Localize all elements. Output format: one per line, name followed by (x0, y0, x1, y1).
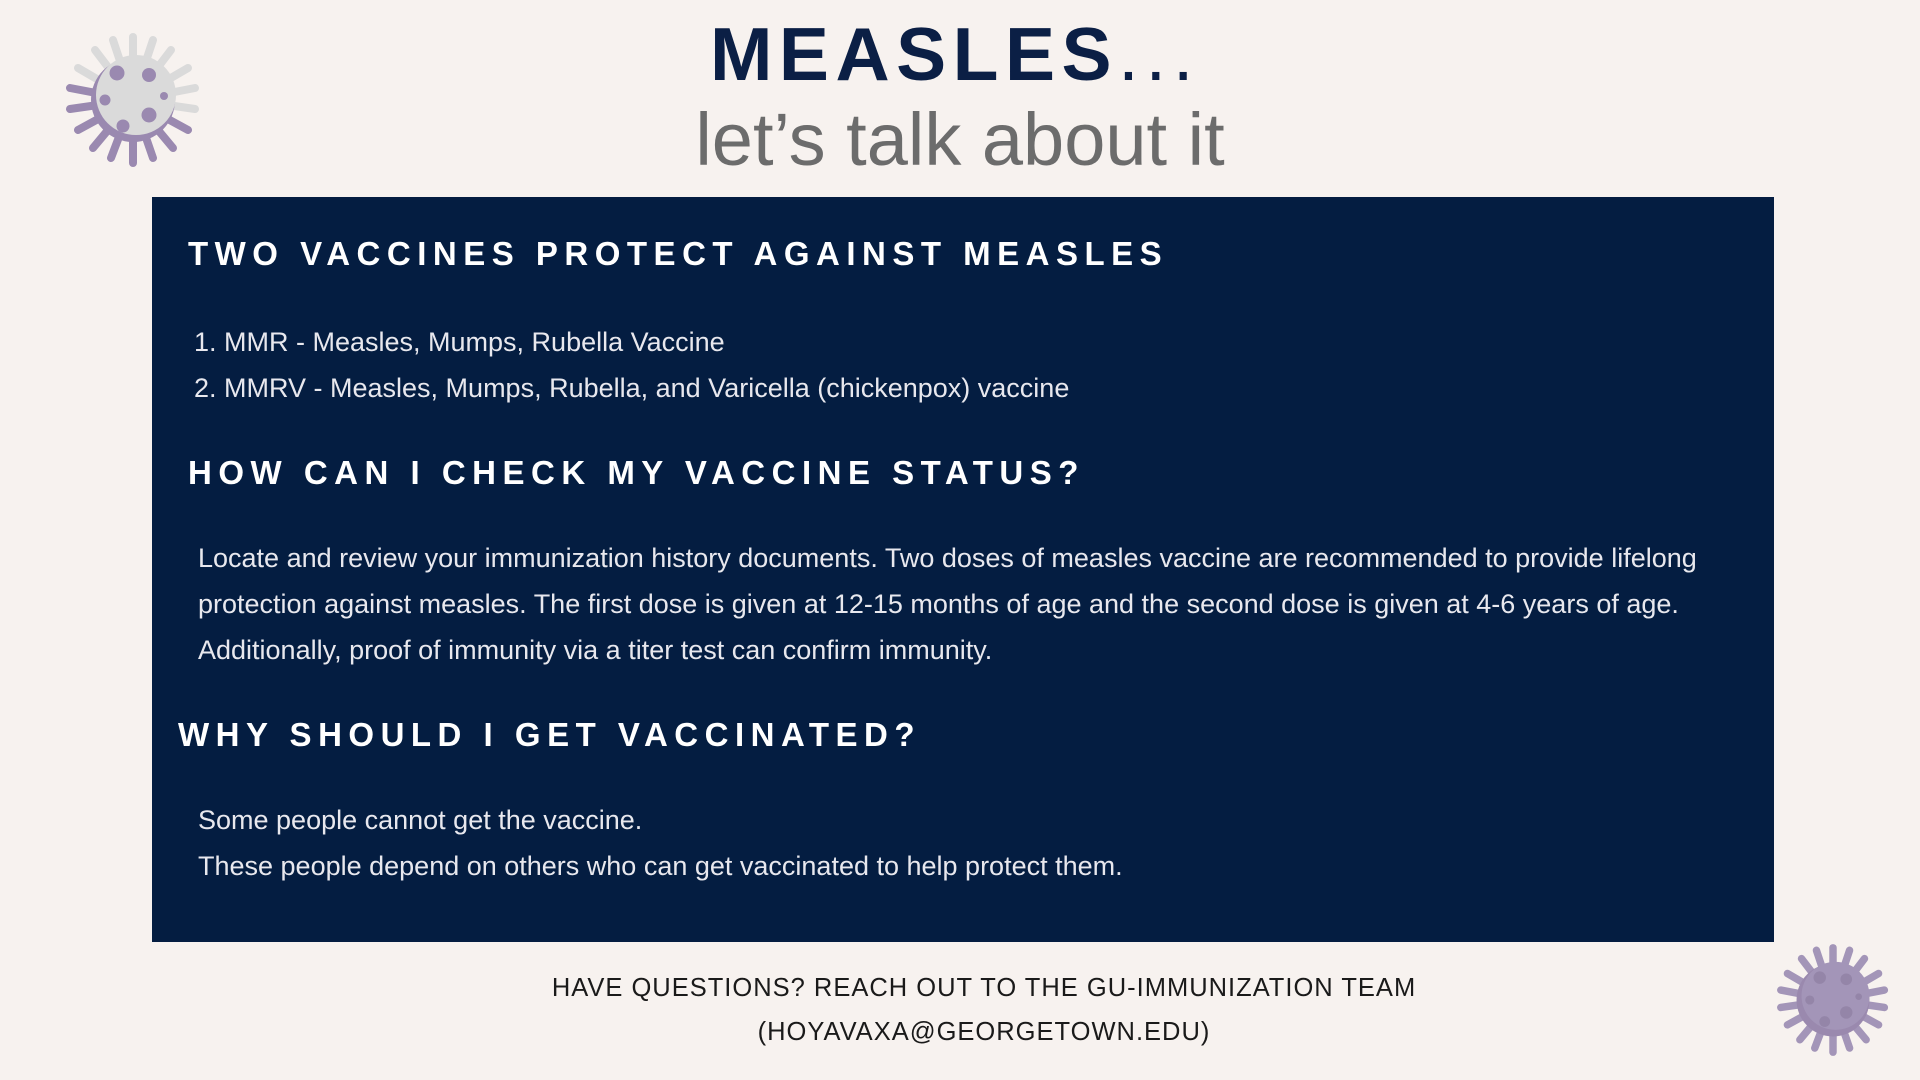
heading: check status: HOW CAN I CHECK MY VACCINE STATUS? (188, 454, 1085, 491)
footer contact (552, 974, 1416, 1046)
text: check status: protection against measles. The first dose is given at 12-15 months of age and the second dose is given at 4-6 years of age. (198, 589, 1679, 619)
list: vaccines: 2. MMRV - Measles, Mumps, Rubella, and Varicella (chickenpox) vaccine (194, 373, 1069, 403)
subtitle: let’s talk about it (695, 98, 1225, 181)
list: vaccines: 1. MMR - Measles, Mumps, Rubella Vaccine (194, 327, 725, 357)
text: why vaccinate (198, 805, 1123, 881)
footer contact: (HOYAVAXA@GEORGETOWN.EDU) (758, 1018, 1210, 1046)
title: MEASLES... (710, 12, 1200, 96)
text: check status: Additionally, proof of immunity via a titer test can confirm immunity. (198, 635, 992, 665)
text: why vaccinate: Some people cannot get the vaccine. (198, 805, 642, 835)
icon: virus top-left (66, 33, 199, 167)
text: check status: Locate and review your immunization history documents. Two doses of measles vaccine are recommended to provide lifelong (198, 543, 1697, 573)
text: why vaccinate: These people depend on others who can get vaccinated to help protect them. (198, 851, 1123, 881)
footer contact: HAVE QUESTIONS? REACH OUT TO THE GU-IMMUNIZATION TEAM (552, 974, 1416, 1002)
heading: why vaccinate: WHY SHOULD I GET VACCINATED? (178, 716, 921, 753)
text: check status (198, 543, 1697, 665)
heading: two vaccines: TWO VACCINES PROTECT AGAINST MEASLES (188, 235, 1168, 272)
list: vaccines (194, 327, 1069, 403)
panel: main (152, 197, 1774, 942)
icon: virus bottom-right (1777, 944, 1888, 1056)
